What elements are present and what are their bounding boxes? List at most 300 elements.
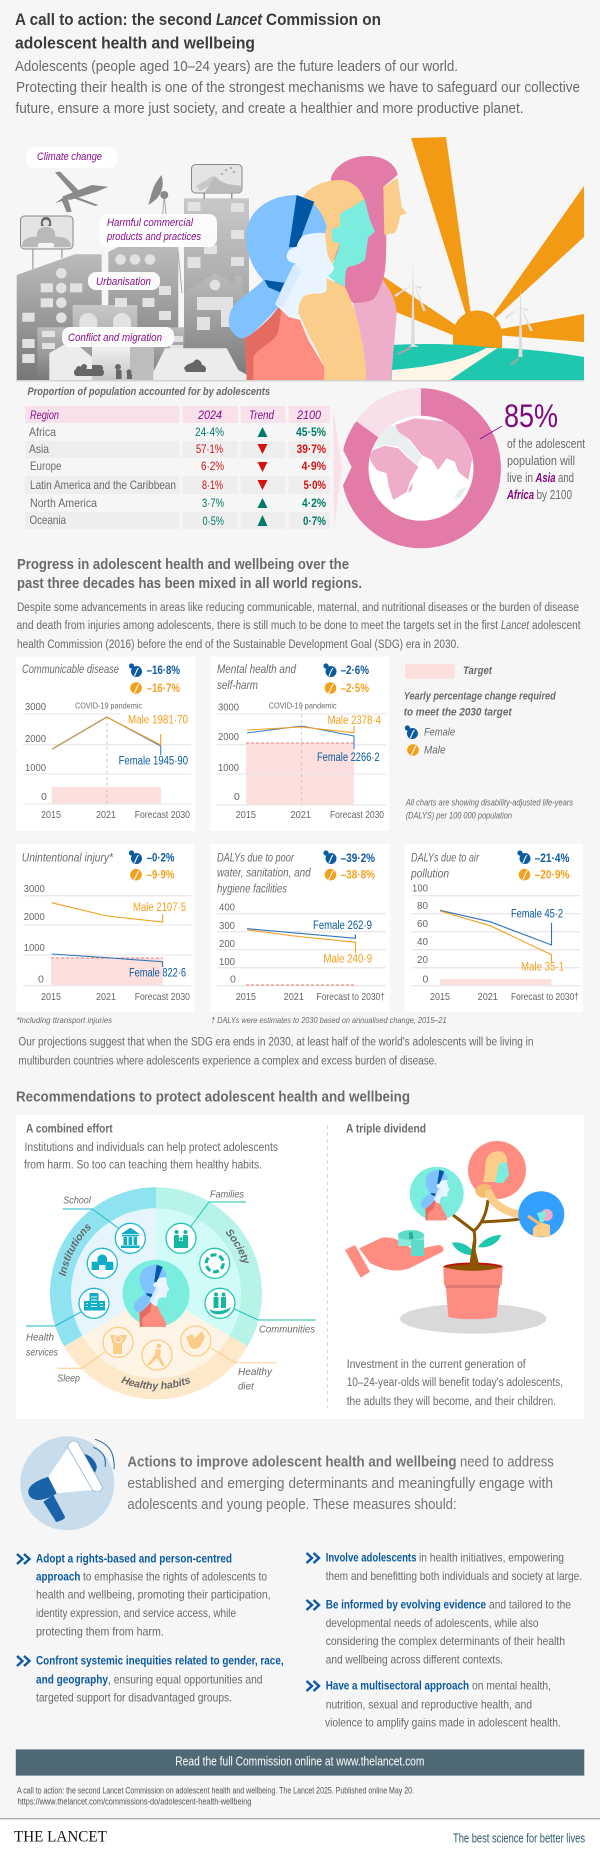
- panel: recommendations: [16, 1115, 584, 1419]
- progress paragraph: health Commission (2016) before the end of the Sustainable Development Goal (SDG) era in 2030.: [17, 639, 459, 651]
- smoke and rubble: [49, 345, 249, 381]
- panel: a triple dividend: [345, 1124, 564, 1408]
- action: rights-based approach: Adopt a rights-based and person-centred: [36, 1552, 232, 1566]
- action: rights-based approach: approach: [36, 1570, 80, 1584]
- change values: –21·4%: [535, 851, 570, 865]
- sector: society: [156, 1187, 262, 1346]
- lines: [52, 717, 161, 755]
- x axis: Forecast 2030: [330, 809, 384, 821]
- icon: circle of hands: [200, 1248, 230, 1278]
- projections paragraph: Our projections suggest that when the SDG era ends in 2030, at least half of the world's adolescents will be living in: [18, 1037, 533, 1049]
- label: harmful commercial products: Harmful commercial: [107, 217, 193, 229]
- lines: [247, 929, 356, 953]
- table header: [30, 408, 321, 422]
- callout: 85 percent: [504, 398, 585, 502]
- billboard: vaping: [192, 164, 242, 199]
- label: society: [226, 1230, 249, 1264]
- callout: 85 percent: live in: [507, 471, 533, 485]
- legend: [404, 664, 573, 821]
- wheel labels: services: [26, 1347, 59, 1359]
- y axis: 400: [219, 902, 235, 914]
- portrait: child: [518, 1191, 564, 1237]
- y axis: 1000: [25, 762, 46, 774]
- row: Africa: 45·5%: [296, 425, 326, 439]
- row: Latin America and the Caribbean: [30, 478, 326, 492]
- change values: [129, 663, 180, 695]
- legend heading: Yearly percentage change required: [404, 691, 556, 703]
- adolescent figure: middle: [298, 180, 375, 381]
- lines: [247, 726, 354, 749]
- chart title: pollution: [410, 868, 449, 880]
- x axis: 2021: [96, 809, 116, 821]
- row: Europe: [30, 459, 326, 473]
- table header: Trend: [249, 408, 274, 422]
- y axis: 2000: [218, 731, 239, 743]
- actions intro text: need to address: [460, 1454, 554, 1471]
- bottom edge of hero: [16, 380, 584, 382]
- y axis: 1000: [218, 762, 239, 774]
- icon: hospital: [79, 1288, 109, 1318]
- heading: progress: past three decades has been mixed in all world regions.: [17, 576, 362, 592]
- y axis: [24, 883, 45, 986]
- progress paragraph: [16, 602, 581, 651]
- line labels: Male 240·9: [323, 954, 372, 966]
- table bands: [25, 406, 330, 529]
- x axis: Forecast 2030: [135, 809, 190, 821]
- title: adolescent health and wellbeing: [15, 34, 255, 53]
- target area: [52, 787, 161, 804]
- label: conflict and migration: [62, 327, 174, 347]
- line labels: Male 2378·4: [328, 715, 381, 727]
- icon: school: [115, 1223, 145, 1253]
- legend: female: Female: [424, 727, 455, 739]
- description: 10–24-year-olds will benefit today's adolescents,: [347, 1377, 563, 1389]
- projections paragraph: multiburden countries where adolescents experience a complex and excess burden of disease.: [18, 1056, 437, 1068]
- y axis: [25, 701, 47, 803]
- table: population share by region: [25, 386, 330, 529]
- change values: –9·9%: [147, 868, 175, 882]
- action: confront systemic inequities: , ensuring equal opportunities and: [108, 1673, 262, 1687]
- callout: 85 percent: and: [558, 471, 574, 485]
- y axis: 100: [412, 883, 428, 895]
- leaves: [452, 1235, 501, 1255]
- legend note: (DALYS) per 100 000 population: [406, 811, 512, 821]
- y axis: 40: [417, 936, 428, 948]
- billboard: person on phone: [20, 216, 73, 269]
- chart title: DALYs due to air: [411, 853, 480, 865]
- x axis: Forecast to 2030†: [511, 991, 579, 1003]
- icon: megaphone: [20, 1436, 114, 1530]
- chart title: Communicable disease: [22, 664, 119, 676]
- lines: [52, 903, 163, 967]
- row: Europe: 6·2%: [201, 459, 224, 473]
- legend: male: [407, 744, 446, 757]
- target line: [246, 984, 356, 986]
- action: evolving evidence: [306, 1598, 571, 1667]
- chart: communicable disease: [16, 657, 196, 831]
- grid: [217, 714, 386, 805]
- label: institutions: Institutions: [58, 1224, 91, 1276]
- action: confront systemic inequities: and geography: [36, 1673, 108, 1687]
- action: evolving evidence: considering the complex determinants of their health: [326, 1634, 565, 1648]
- x axis: [41, 809, 190, 821]
- y axis: [219, 902, 236, 986]
- portrait: adolescent: [410, 1167, 464, 1221]
- line labels: Female 2266·2: [317, 752, 380, 764]
- y axis: 1000: [24, 942, 45, 954]
- description: from harm. So too can teaching them healthy habits.: [24, 1160, 262, 1172]
- legend note: [405, 798, 573, 821]
- row: Oceania: 0·5%: [202, 514, 224, 528]
- wheel labels: School: [63, 1195, 91, 1207]
- row: Asia: Asia: [29, 442, 49, 456]
- call to action banner: [16, 1749, 584, 1776]
- projections paragraph: [18, 1037, 533, 1068]
- row: Africa: [29, 425, 326, 439]
- call to action banner: Read the full Commission online at www.thelancet.com: [175, 1754, 424, 1769]
- y axis: 3000: [25, 701, 46, 713]
- label: harmful commercial products: [100, 214, 217, 247]
- action: confront systemic inequities: [17, 1654, 284, 1705]
- change values: [323, 663, 369, 695]
- x axis: 2015: [41, 809, 61, 821]
- row: Europe: 4·9%: [302, 459, 326, 473]
- action: multisectoral approach: on mental health,: [472, 1679, 551, 1693]
- line labels: Female 1945·90: [119, 756, 188, 768]
- chart title: hygiene facilities: [217, 884, 287, 896]
- wheel diagram: [26, 1187, 316, 1400]
- icon: satellite dish: [148, 175, 168, 205]
- action: rights-based approach: [17, 1552, 271, 1639]
- callout: 85 percent: Asia: [535, 471, 556, 485]
- wheel labels: [26, 1189, 316, 1393]
- adolescent figure: front: [229, 195, 334, 381]
- windows: [22, 202, 244, 363]
- icon: healthy diet: [181, 1326, 211, 1356]
- row: Asia: 39·7%: [297, 442, 326, 456]
- y axis: 200: [219, 938, 235, 950]
- y axis: [218, 702, 240, 803]
- communications tower lattice: [160, 195, 182, 293]
- plant illustration: [345, 1141, 564, 1334]
- icon: drone: [55, 172, 108, 212]
- line labels: Male 2107·5: [133, 902, 186, 914]
- actions intro text: [127, 1454, 554, 1513]
- x axis: Forecast to 2030†: [316, 991, 385, 1003]
- chart title: Mental health and: [217, 664, 297, 676]
- change values: –20·9%: [535, 868, 570, 882]
- icon: community: [205, 1288, 235, 1318]
- footer bar: [0, 1818, 600, 1854]
- line labels: Female 262·9: [313, 920, 372, 932]
- wheel labels: Sleep: [57, 1373, 80, 1385]
- change values: –16·7%: [147, 681, 180, 695]
- row: Latin America and the Caribbean: 5·0%: [304, 478, 326, 492]
- label: healthy habits: Healthy habits: [121, 1376, 190, 1392]
- sector: healthy habits: [64, 1293, 248, 1399]
- change values: –16·8%: [147, 663, 180, 677]
- x axis: [236, 809, 384, 821]
- wheel labels: Healthy: [238, 1366, 273, 1378]
- grid: [23, 896, 191, 986]
- panel: a combined effort: [24, 1124, 316, 1400]
- legend: target: Target: [463, 665, 493, 677]
- icon: family: [166, 1223, 196, 1253]
- actions intro text: Actions to improve adolescent health and wellbeing: [127, 1454, 457, 1471]
- line labels: COVID-19 pandemic: [269, 701, 337, 711]
- progress paragraph: adolescent: [532, 620, 581, 632]
- icon: coins: [398, 1230, 424, 1256]
- action: involve adolescents: Involve adolescents: [326, 1551, 417, 1565]
- description: [24, 1142, 278, 1172]
- grid: [217, 914, 386, 986]
- row: Oceania: Oceania: [30, 513, 66, 527]
- intro text: [15, 58, 580, 117]
- wheel labels: Families: [210, 1189, 245, 1201]
- row: North America: 4·2%: [302, 496, 326, 510]
- row: Latin America and the Caribbean: 8·1%: [202, 478, 223, 492]
- intro text: Adolescents (people aged 10–24 years) are the future leaders of our world.: [15, 58, 458, 75]
- grid: [412, 896, 580, 986]
- x axis: 2021: [290, 809, 311, 821]
- chart: water, sanitation and hygiene: [210, 844, 390, 1012]
- y axis: 0: [422, 974, 428, 986]
- title: A call to action: the second: [15, 10, 212, 29]
- world map: [370, 418, 472, 500]
- description: Investment in the current generation of: [347, 1359, 526, 1371]
- x axis: [236, 991, 385, 1003]
- heading: progress: Progress in adolescent health and wellbeing over the: [17, 557, 349, 573]
- line labels: [313, 920, 372, 966]
- label: harmful commercial products: products and practices: [106, 231, 201, 243]
- line labels: Female 45·2: [511, 909, 563, 921]
- wheel labels: Communities: [259, 1323, 316, 1335]
- wheel labels: Health: [26, 1332, 54, 1344]
- target area: [246, 743, 354, 805]
- line labels: COVID-19 pandemic: [75, 701, 143, 711]
- footnotes: *Including ttransport injuries: [16, 1015, 113, 1025]
- chart title: DALYs due to poor: [217, 853, 295, 865]
- land: [390, 344, 584, 380]
- y axis: 0: [41, 791, 47, 803]
- chart: unintentional injury: [16, 844, 194, 1012]
- target area: [440, 979, 552, 986]
- chart title: water, sanitation, and: [217, 868, 311, 880]
- footnotes: † DALYs were estimates to 2030 based on annualised change, 2015–21: [211, 1015, 447, 1025]
- hero illustration: [16, 137, 584, 382]
- title: Commission on: [266, 10, 381, 29]
- chart: mental health and self-harm: [210, 657, 389, 831]
- line labels: [511, 909, 564, 974]
- x axis: Forecast 2030: [135, 991, 190, 1003]
- change values: –2·5%: [341, 681, 369, 695]
- x axis: [41, 991, 190, 1003]
- callout: 85 percent: 85%: [504, 398, 558, 434]
- legend heading: to meet the 2030 target: [404, 707, 513, 719]
- row: North America: North America: [30, 496, 97, 510]
- y axis: 0: [234, 791, 240, 803]
- y axis: 20: [417, 954, 428, 966]
- row: North America: [30, 496, 326, 510]
- action: evolving evidence: and tailored to the: [489, 1598, 571, 1612]
- row: Africa: 24·4%: [195, 425, 224, 439]
- chart title: [217, 853, 311, 896]
- callout: 85 percent: Africa: [506, 488, 534, 502]
- callout: 85 percent: population will: [507, 454, 575, 468]
- label: urbanisation: Urbanisation: [96, 276, 151, 288]
- change values: –0·2%: [147, 851, 175, 865]
- action: rights-based approach: identity expression, and service access, while: [36, 1606, 236, 1620]
- row: Oceania: 0·7%: [303, 514, 326, 528]
- centre portrait: [122, 1260, 190, 1327]
- citation: [17, 1786, 414, 1807]
- chart: air pollution: [404, 844, 583, 1012]
- y axis: [412, 883, 428, 986]
- action: confront systemic inequities: Confront systemic inequities related to gender, race,: [36, 1654, 284, 1668]
- callout lines: [26, 1202, 316, 1368]
- x axis: 2015: [236, 809, 256, 821]
- line labels: [75, 701, 188, 768]
- line labels: Female 822·6: [129, 968, 186, 980]
- actions intro text: adolescents and young people. These measures should:: [127, 1496, 457, 1513]
- intro text: future, ensure a more just society, and create a healthier and more productive planet.: [16, 100, 524, 117]
- city buildings: [17, 198, 249, 381]
- legend heading: [404, 691, 556, 719]
- leader line: [480, 426, 502, 439]
- action: multisectoral approach: [306, 1679, 561, 1730]
- sector: institutions: [50, 1187, 156, 1346]
- sub-heading: A combined effort: [26, 1124, 113, 1136]
- row: Europe: Europe: [30, 459, 62, 473]
- line labels: Male 35·1: [521, 962, 564, 974]
- progress paragraph: and death from injuries among adolescents, there is still much to be done to meet the targets set in the first: [16, 620, 499, 632]
- x axis: 2021: [284, 991, 304, 1003]
- action: rights-based approach: protecting them from harm.: [36, 1625, 164, 1639]
- actions intro text: established and emerging determinants and meaningfully engage with: [127, 1475, 553, 1492]
- x axis: 2021: [96, 991, 116, 1003]
- line labels: [129, 902, 186, 980]
- legend: target: [405, 664, 493, 679]
- y axis: 300: [219, 920, 235, 932]
- label: climate change: Climate change: [37, 151, 102, 163]
- change values: –2·6%: [341, 663, 369, 677]
- connector wedge from table to donut: [333, 407, 342, 530]
- action: evolving evidence: Be informed by evolving evidence: [326, 1598, 486, 1612]
- heading: progress: [17, 557, 362, 592]
- title: [15, 10, 381, 53]
- donut chart: 85% of adolescents: [335, 388, 502, 548]
- citation: A call to action: the second Lancet Commission on adolescent health and wellbeing. The Lancet 2025. Published online May 20.: [17, 1786, 414, 1796]
- icon: coins: $: [409, 1232, 414, 1240]
- line labels: Male 1981·70: [128, 715, 188, 727]
- target area: [51, 958, 163, 986]
- change values: –38·8%: [341, 868, 375, 882]
- change values: [129, 850, 175, 882]
- action: involve adolescents: [306, 1551, 582, 1583]
- y axis: 2000: [24, 911, 45, 923]
- y axis: 60: [417, 918, 428, 930]
- description: Institutions and individuals can help protect adolescents: [24, 1142, 278, 1154]
- icon: institution building: [87, 1248, 117, 1278]
- action: evolving evidence: developmental needs of adolescents, while also: [326, 1616, 539, 1630]
- y axis: 2000: [25, 733, 46, 745]
- y axis: 100: [219, 956, 235, 968]
- chart title: self-harm: [217, 680, 258, 692]
- action: involve adolescents: in health initiatives, empowering: [419, 1551, 564, 1565]
- action: evolving evidence: and wellbeing across different contexts.: [326, 1653, 503, 1667]
- y axis: 3000: [218, 702, 239, 714]
- icon: sleep: [103, 1327, 133, 1357]
- pot: [443, 1240, 503, 1319]
- label: conflict and migration: Conflict and migration: [68, 332, 162, 344]
- citation: https://www.thelancet.com/commissions-do/adolescent-health-wellbeing: [18, 1797, 251, 1807]
- y axis: 3000: [24, 883, 45, 895]
- icon: hand: [345, 1237, 443, 1278]
- heading: recommendations: Recommendations to protect adolescent health and wellbeing: [16, 1089, 410, 1106]
- chart title: [410, 853, 480, 880]
- callout: 85 percent: by 2100: [536, 488, 572, 502]
- change values: [323, 850, 375, 882]
- refugees and vehicle silhouettes: [74, 359, 206, 379]
- shadow: [400, 1304, 547, 1334]
- description: the adults they will become, and their children.: [347, 1396, 556, 1408]
- action: multisectoral approach: Have a multisectoral approach: [326, 1679, 469, 1693]
- legend: female: [405, 725, 455, 739]
- grid: [23, 714, 191, 804]
- lines: [440, 910, 552, 962]
- row: Latin America and the Caribbean: Latin America and the Caribbean: [30, 478, 176, 492]
- row: Asia: [29, 442, 326, 456]
- callout: 85 percent: of the adolescent: [507, 437, 585, 451]
- x axis: 2015: [236, 991, 256, 1003]
- label: urbanisation: [88, 272, 160, 290]
- table header: 2024: [197, 408, 222, 422]
- label: climate change: [26, 147, 118, 168]
- footnotes: [16, 1015, 447, 1025]
- icon: physical activity: [142, 1340, 172, 1370]
- action: confront systemic inequities: targeted support for disadvantaged groups.: [36, 1691, 232, 1705]
- change values: –39·2%: [341, 851, 375, 865]
- x axis: 2015: [41, 991, 61, 1003]
- row: Africa: Africa: [29, 425, 56, 439]
- row: Asia: 57·1%: [196, 442, 223, 456]
- y axis: 0: [38, 974, 44, 986]
- adolescent figure: back: [331, 156, 407, 381]
- action: rights-based approach: to emphasise the rights of adolescents to: [83, 1570, 267, 1584]
- icon: sun and rays: [381, 137, 584, 348]
- y axis: 80: [417, 900, 428, 912]
- chart title: [217, 664, 297, 692]
- row: North America: 3·7%: [202, 496, 224, 510]
- x axis: 2021: [478, 991, 498, 1003]
- portrait: adult: [468, 1141, 526, 1215]
- description: [347, 1359, 563, 1408]
- progress paragraph: Lancet: [501, 620, 530, 632]
- y axis: 0: [230, 974, 236, 986]
- action: multisectoral approach: nutrition, sexual and reproductive health, and: [326, 1697, 532, 1711]
- row: Oceania: [30, 513, 326, 528]
- table header: 2100: [296, 408, 321, 422]
- table header: Region: [30, 408, 59, 422]
- title: Lancet: [216, 10, 263, 29]
- table heading: Proportion of population accounted for by adolescents: [28, 386, 270, 398]
- footer bar: THE LANCET: [14, 1829, 107, 1846]
- wheel labels: diet: [238, 1381, 255, 1393]
- action: multisectoral approach: violence to amplify gains made in adolescent health.: [325, 1716, 561, 1730]
- change values: [517, 850, 570, 882]
- sub-heading: A triple dividend: [346, 1124, 426, 1136]
- x axis: [430, 991, 579, 1003]
